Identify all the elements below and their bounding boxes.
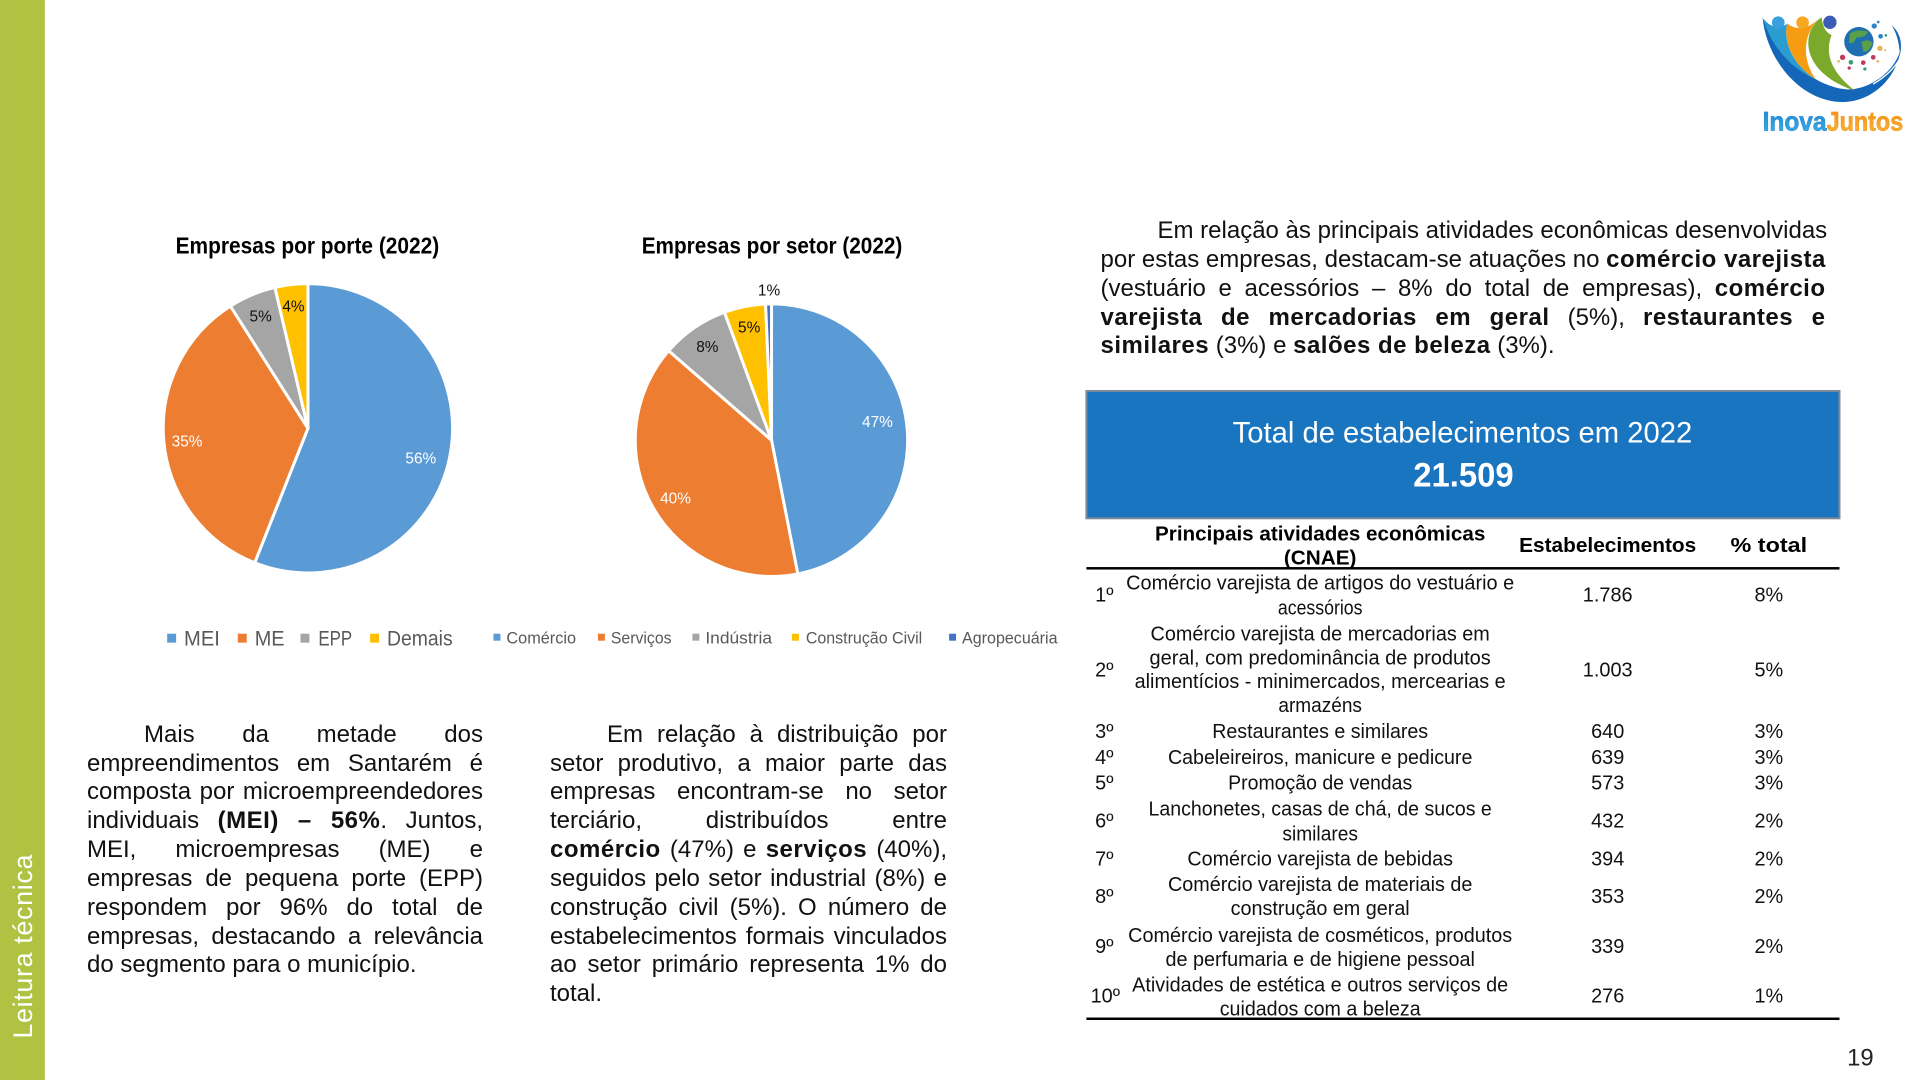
- page number: 19: [1847, 1044, 1874, 1071]
- rows: Comércio varejista de cosméticos, produtos: [1128, 925, 1512, 947]
- rows: Comércio varejista de artigos do vestuário e: [1126, 573, 1514, 595]
- legend: porte: EPP: [318, 628, 352, 651]
- rows: 3%: [1754, 747, 1783, 769]
- text block: porte: composta por microempreendedores: [87, 778, 483, 805]
- legend: porte: Demais: [387, 628, 453, 651]
- logo: Inova Juntos: Inova: [1763, 106, 1827, 136]
- text block: porte: empreendimentos em Santarém é: [87, 750, 483, 777]
- panel: total de estabelecimentos: [1086, 391, 1839, 518]
- rows: Promoção de vendas: [1228, 773, 1412, 795]
- pie chart: empresas por setor: 5%: [738, 319, 761, 336]
- rows: 2%: [1754, 848, 1783, 870]
- rows: Lanchonetes, casas de chá, de sucos e: [1149, 799, 1492, 821]
- text block: porte: MEI, microempresas (ME) e: [87, 836, 483, 863]
- rows: 639: [1591, 747, 1624, 769]
- pie chart: empresas por setor: [635, 282, 908, 576]
- panel: total de estabelecimentos: Total de estabelecimentos em 2022: [1233, 417, 1692, 450]
- rows: Atividades de estética e outros serviços de: [1132, 975, 1508, 997]
- legend: setor: [493, 630, 1058, 648]
- rows: 2%: [1754, 886, 1783, 908]
- legend: setor: Indústria: [705, 630, 773, 648]
- pie chart: empresas por setor: 40%: [660, 490, 691, 507]
- rows: 4º: [1095, 747, 1114, 769]
- rows: 8º: [1095, 886, 1114, 908]
- text block: setor: Em relação à distribuição por: [607, 721, 947, 748]
- rows: Comércio varejista de bebidas: [1187, 848, 1453, 870]
- text block: setor: terciário, distribuídos entre: [550, 807, 947, 834]
- rows: 640: [1591, 721, 1624, 743]
- rows: 339: [1591, 936, 1624, 958]
- table header: Estabelecimentos: [1519, 535, 1696, 557]
- rows: geral, com predominância de produtos: [1150, 647, 1491, 669]
- pie chart: empresas por setor: 8%: [696, 339, 719, 356]
- rows: 2º: [1095, 659, 1114, 681]
- rows: 394: [1591, 848, 1624, 870]
- rows: 432: [1591, 811, 1624, 833]
- legend: setor: Construção Civil: [806, 630, 922, 648]
- rows: cuidados com a beleza: [1220, 999, 1422, 1021]
- legend: setor: Comércio: [506, 630, 576, 648]
- text block: porte: individuais (MEI) – 56%. Juntos,: [87, 807, 483, 834]
- text block: setor: comércio (47%) e serviços (40%),: [550, 836, 947, 863]
- pie chart: empresas por porte: 35%: [172, 434, 203, 451]
- text block: atividades econômicas: por estas empresas, destacam-se atuações no comércio varejista: [1100, 246, 1826, 273]
- text block: atividades econômicas: [1100, 217, 1827, 359]
- pie chart: empresas por porte: 4%: [282, 298, 305, 315]
- text block: atividades econômicas: varejista de mercadorias em geral (5%), restaurantes e: [1100, 304, 1825, 331]
- text block: atividades econômicas: similares (3%) e salões de beleza (3%).: [1100, 332, 1555, 359]
- pie chart: empresas por setor: 47%: [862, 414, 893, 431]
- legend: porte: [167, 628, 453, 651]
- logo: Inova Juntos: [1763, 16, 1903, 136]
- rows: 1.003: [1583, 659, 1633, 681]
- rows: Comércio varejista de mercadorias em: [1151, 623, 1490, 645]
- text block: setor: ao setor primário representa 1% do: [550, 951, 947, 978]
- pie chart: empresas por porte: [163, 284, 453, 573]
- text block: setor: empresas encontram-se no setor: [550, 778, 947, 805]
- text block: porte: Mais da metade dos: [144, 721, 483, 748]
- rows: 6º: [1095, 811, 1114, 833]
- rows: 276: [1591, 986, 1624, 1008]
- rows: 3%: [1754, 721, 1783, 743]
- rows: 1º: [1095, 585, 1114, 607]
- pie chart: empresas por porte: 5%: [250, 308, 272, 325]
- rows: Restaurantes e similares: [1212, 721, 1428, 743]
- rows: 9º: [1095, 936, 1114, 958]
- text block: atividades econômicas: Em relação às principais atividades econômicas desenvolvidas: [1158, 217, 1827, 244]
- rows: 8%: [1754, 585, 1783, 607]
- table header: Principais atividades econômicas: [1155, 524, 1485, 546]
- rows: 353: [1591, 886, 1624, 908]
- text block: setor: setor produtivo, a maior parte das: [550, 750, 947, 777]
- chart title: Empresas por setor: Empresas por setor (2022): [642, 233, 902, 259]
- rows: 3º: [1095, 721, 1114, 743]
- rows: 1.786: [1583, 585, 1633, 607]
- text block: porte: empresas, destacando a relevância: [87, 923, 483, 950]
- text block: setor: construção civil (5%). O número de: [550, 894, 947, 921]
- text block: atividades econômicas: (vestuário e acessórios – 8% do total de empresas), comércio: [1100, 275, 1826, 302]
- text block: setor: estabelecimentos formais vinculados: [550, 923, 947, 950]
- rows: similares: [1282, 823, 1358, 845]
- rows: 3%: [1754, 773, 1783, 795]
- text block: porte: [87, 721, 483, 978]
- pie chart: empresas por setor: 1%: [758, 282, 780, 299]
- rows: 2%: [1754, 811, 1783, 833]
- rows: Cabeleireiros, manicure e pedicure: [1168, 747, 1472, 769]
- rows: construção em geral: [1231, 898, 1410, 920]
- rows: alimentícios - minimercados, mercearias e: [1135, 671, 1506, 693]
- rows: Comércio varejista de materiais de: [1168, 874, 1472, 896]
- side band: [0, 0, 45, 1080]
- rows: armazéns: [1278, 695, 1362, 717]
- rows: de perfumaria e de higiene pessoal: [1165, 949, 1475, 971]
- text block: setor: seguidos pelo setor industrial (8%) e: [550, 865, 947, 892]
- rows: 10º: [1091, 986, 1121, 1008]
- text block: porte: empresas de pequena porte (EPP): [87, 865, 483, 892]
- text block: setor: [550, 721, 947, 1007]
- rows: 5º: [1095, 773, 1114, 795]
- legend: porte: MEI: [184, 628, 220, 651]
- panel: total de estabelecimentos: 21.509: [1413, 456, 1514, 494]
- chart title: Empresas por porte: Empresas por porte (2022): [176, 233, 439, 259]
- legend: setor: Agropecuária: [962, 630, 1058, 648]
- logo: Inova Juntos: Juntos: [1827, 106, 1903, 136]
- pie chart: empresas por porte: 56%: [405, 451, 437, 468]
- table header: % total: [1731, 535, 1807, 557]
- table header: (CNAE): [1284, 548, 1356, 570]
- legend: setor: Serviços: [611, 630, 672, 648]
- side band: Leitura técnica: [8, 855, 38, 1039]
- rows: acessórios: [1278, 598, 1363, 620]
- rows: 2%: [1754, 936, 1783, 958]
- legend: porte: ME: [255, 628, 285, 651]
- rows: 7º: [1095, 848, 1114, 870]
- table: principais atividades econômicas: [1086, 524, 1839, 1021]
- text block: porte: do segmento para o município.: [87, 951, 417, 978]
- rows: 5%: [1754, 659, 1783, 681]
- table header: [1086, 524, 1839, 570]
- rows: 1%: [1754, 986, 1783, 1008]
- text block: porte: respondem por 96% do total de: [87, 894, 483, 921]
- rows: [1086, 573, 1839, 1021]
- text block: setor: total.: [550, 980, 602, 1007]
- rows: 573: [1591, 773, 1624, 795]
